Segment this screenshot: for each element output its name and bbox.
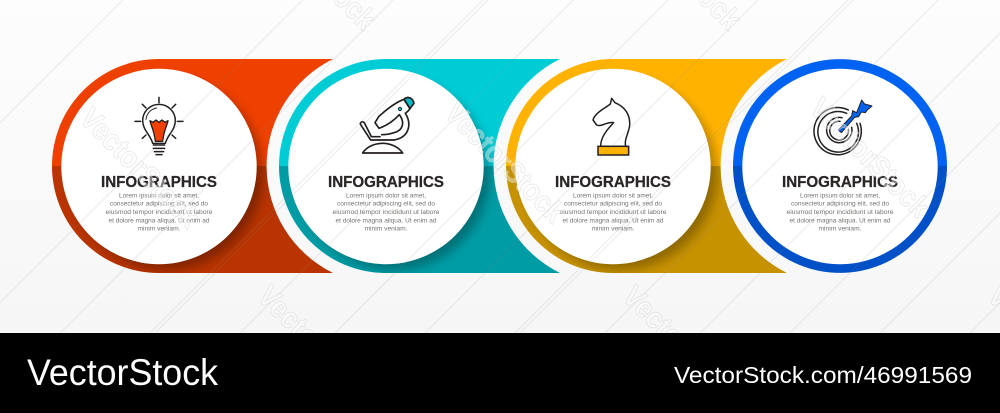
text block 3: minim veniam. — [592, 226, 635, 233]
watermark text: VectorStock — [73, 102, 206, 235]
step 1: red band — [52, 59, 333, 273]
heading 4: INFOGRAPHICS — [782, 174, 898, 191]
text block 2: Lorem ipsum dolor sit amet, — [346, 192, 426, 199]
icon: microscope — [360, 98, 414, 153]
text block 4: et dolore magna aliqua. Ut enim ad — [790, 217, 891, 224]
footer image id: VectorStock.com/46991569 — [674, 362, 972, 388]
text block 1: consectetur adipiscing elit, sed do — [110, 201, 208, 208]
text block 4: eiusmod tempor incididunt ut labore — [786, 209, 894, 216]
step 4: blue ring — [733, 59, 947, 273]
text block 2: eiusmod tempor incididunt ut labore — [332, 209, 440, 216]
text block 1: Lorem ipsum dolor sit amet, — [119, 192, 199, 199]
text block 3: et dolore magna aliqua. Ut enim ad — [562, 217, 664, 224]
footer bar — [0, 333, 1000, 413]
text block 1: eiusmod tempor incididunt ut labore — [106, 209, 213, 216]
footer logo: VectorStock — [27, 352, 218, 393]
watermark text: VectorStock — [803, 92, 936, 225]
text block 3: eiusmod tempor incididunt ut labore — [560, 209, 667, 216]
text block 2: consectetur adipiscing elit, sed do — [337, 201, 435, 208]
text block 4: consectetur adipiscing elit, sed do — [791, 201, 889, 208]
text block 3: consectetur adipiscing elit, sed do — [564, 201, 662, 208]
text block 1: et dolore magna aliqua. Ut enim ad — [108, 217, 210, 224]
icon: chess knight — [593, 98, 630, 155]
watermark text: VectorStock — [438, 97, 571, 230]
icon: target with dart — [814, 100, 872, 155]
step 2: teal band — [279, 59, 560, 273]
text block 4 — [786, 192, 894, 233]
heading 1: INFOGRAPHICS — [101, 174, 217, 191]
text block 2: et dolore magna aliqua. Ut enim ad — [336, 217, 437, 224]
text block 2: minim veniam. — [364, 226, 408, 233]
text block 2 — [332, 192, 440, 233]
text block 4: Lorem ipsum dolor sit amet, — [800, 192, 880, 199]
step 3: yellow band — [506, 59, 787, 273]
text block 4: minim veniam. — [818, 226, 862, 233]
heading 2: INFOGRAPHICS — [328, 174, 444, 191]
heading 3: INFOGRAPHICS — [555, 174, 671, 191]
text block 3: Lorem ipsum dolor sit amet, — [573, 192, 653, 199]
text block 1: minim veniam. — [138, 226, 181, 233]
icon: light bulb — [135, 97, 183, 155]
text block 1 — [106, 192, 213, 233]
text block 3 — [560, 192, 667, 233]
